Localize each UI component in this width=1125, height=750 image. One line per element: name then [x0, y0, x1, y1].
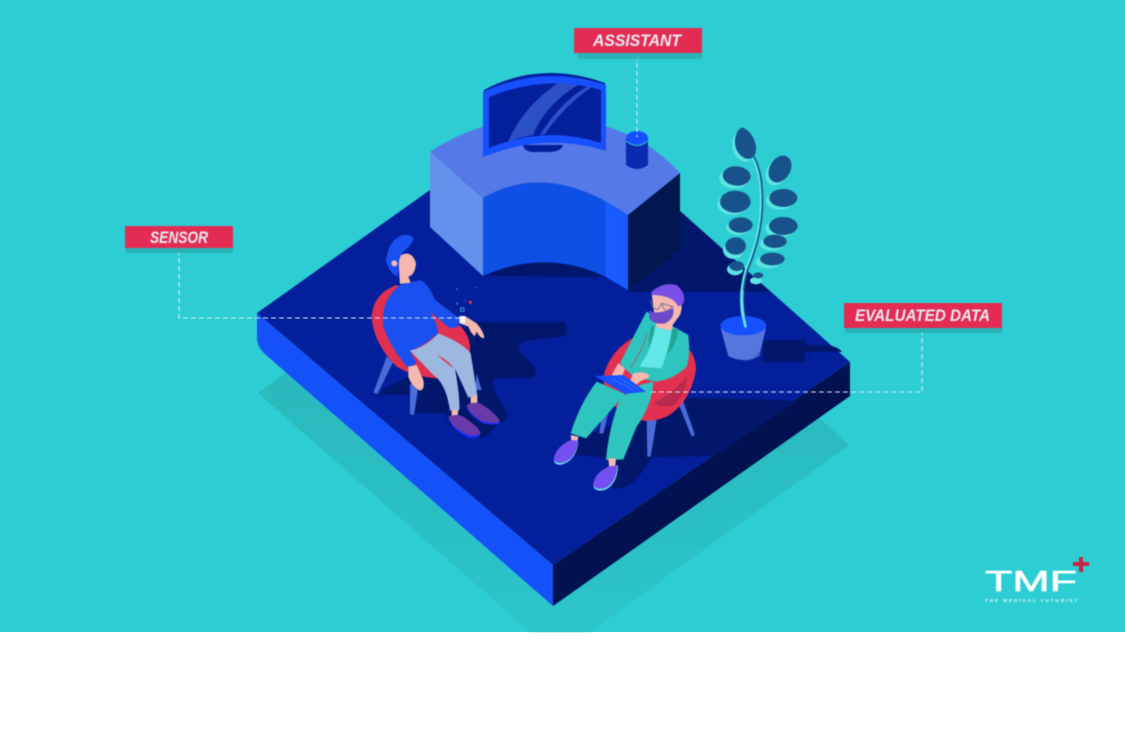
jacket: [620, 312, 689, 382]
desk right face: [628, 173, 680, 290]
pot: [721, 328, 766, 360]
hair: [386, 235, 413, 277]
watch sensor: [459, 316, 465, 323]
label: evaluated data: [844, 303, 1002, 333]
head: [652, 293, 682, 331]
platform ground shadow: [258, 362, 849, 632]
desk shadow on floor: [628, 200, 770, 292]
desk shadow under arch: [483, 262, 606, 277]
label: assistant: [574, 28, 702, 59]
sensor signal dots: [456, 287, 477, 311]
ankles: [571, 435, 616, 468]
callout lines: [179, 55, 922, 392]
logo: THE MEDICAL FUTURIST: [985, 598, 1077, 603]
floor shadow: sensor wearer: [380, 322, 567, 438]
desk left face: [430, 152, 483, 276]
person: clinician with tablet: [554, 284, 696, 491]
label: evaluated data: EVALUATED DATA: [855, 306, 990, 325]
platform: [257, 150, 850, 606]
label: sensor: [125, 226, 233, 253]
monitor: [483, 73, 606, 157]
stem: [741, 157, 761, 327]
ankles: [452, 395, 477, 419]
illustration: [125, 28, 1089, 632]
chair legs: [373, 357, 482, 415]
glasses: [650, 300, 673, 311]
shirt: [639, 327, 672, 368]
desk: [430, 118, 680, 290]
person: sensor wearer: [372, 235, 500, 438]
hair: [652, 284, 684, 307]
lapels: [648, 325, 678, 355]
label: sensor: SENSOR: [150, 228, 209, 247]
shoes: [448, 417, 481, 438]
plant: [717, 127, 798, 361]
logo: TMF: [985, 566, 1077, 598]
desk front face: [483, 182, 628, 290]
desk top: [430, 118, 680, 215]
floor shadow: clinician: [575, 398, 797, 488]
legs: [571, 382, 625, 438]
leaves: [720, 127, 798, 278]
tablet: [595, 375, 646, 394]
logo: [985, 557, 1089, 603]
beard: [649, 308, 674, 324]
hands: [612, 363, 650, 388]
trousers: [410, 333, 477, 411]
plant shadow on floor: [763, 340, 842, 362]
assistant speaker: [626, 131, 648, 169]
shoes: [554, 441, 578, 465]
leaf highlights: [717, 129, 795, 284]
label: assistant: ASSISTANT: [592, 31, 682, 50]
chair: [603, 337, 696, 421]
sweater: [383, 280, 459, 368]
chair legs: [599, 402, 695, 457]
chair: [372, 285, 470, 378]
head and neck: [398, 254, 416, 284]
hands: [408, 365, 424, 391]
